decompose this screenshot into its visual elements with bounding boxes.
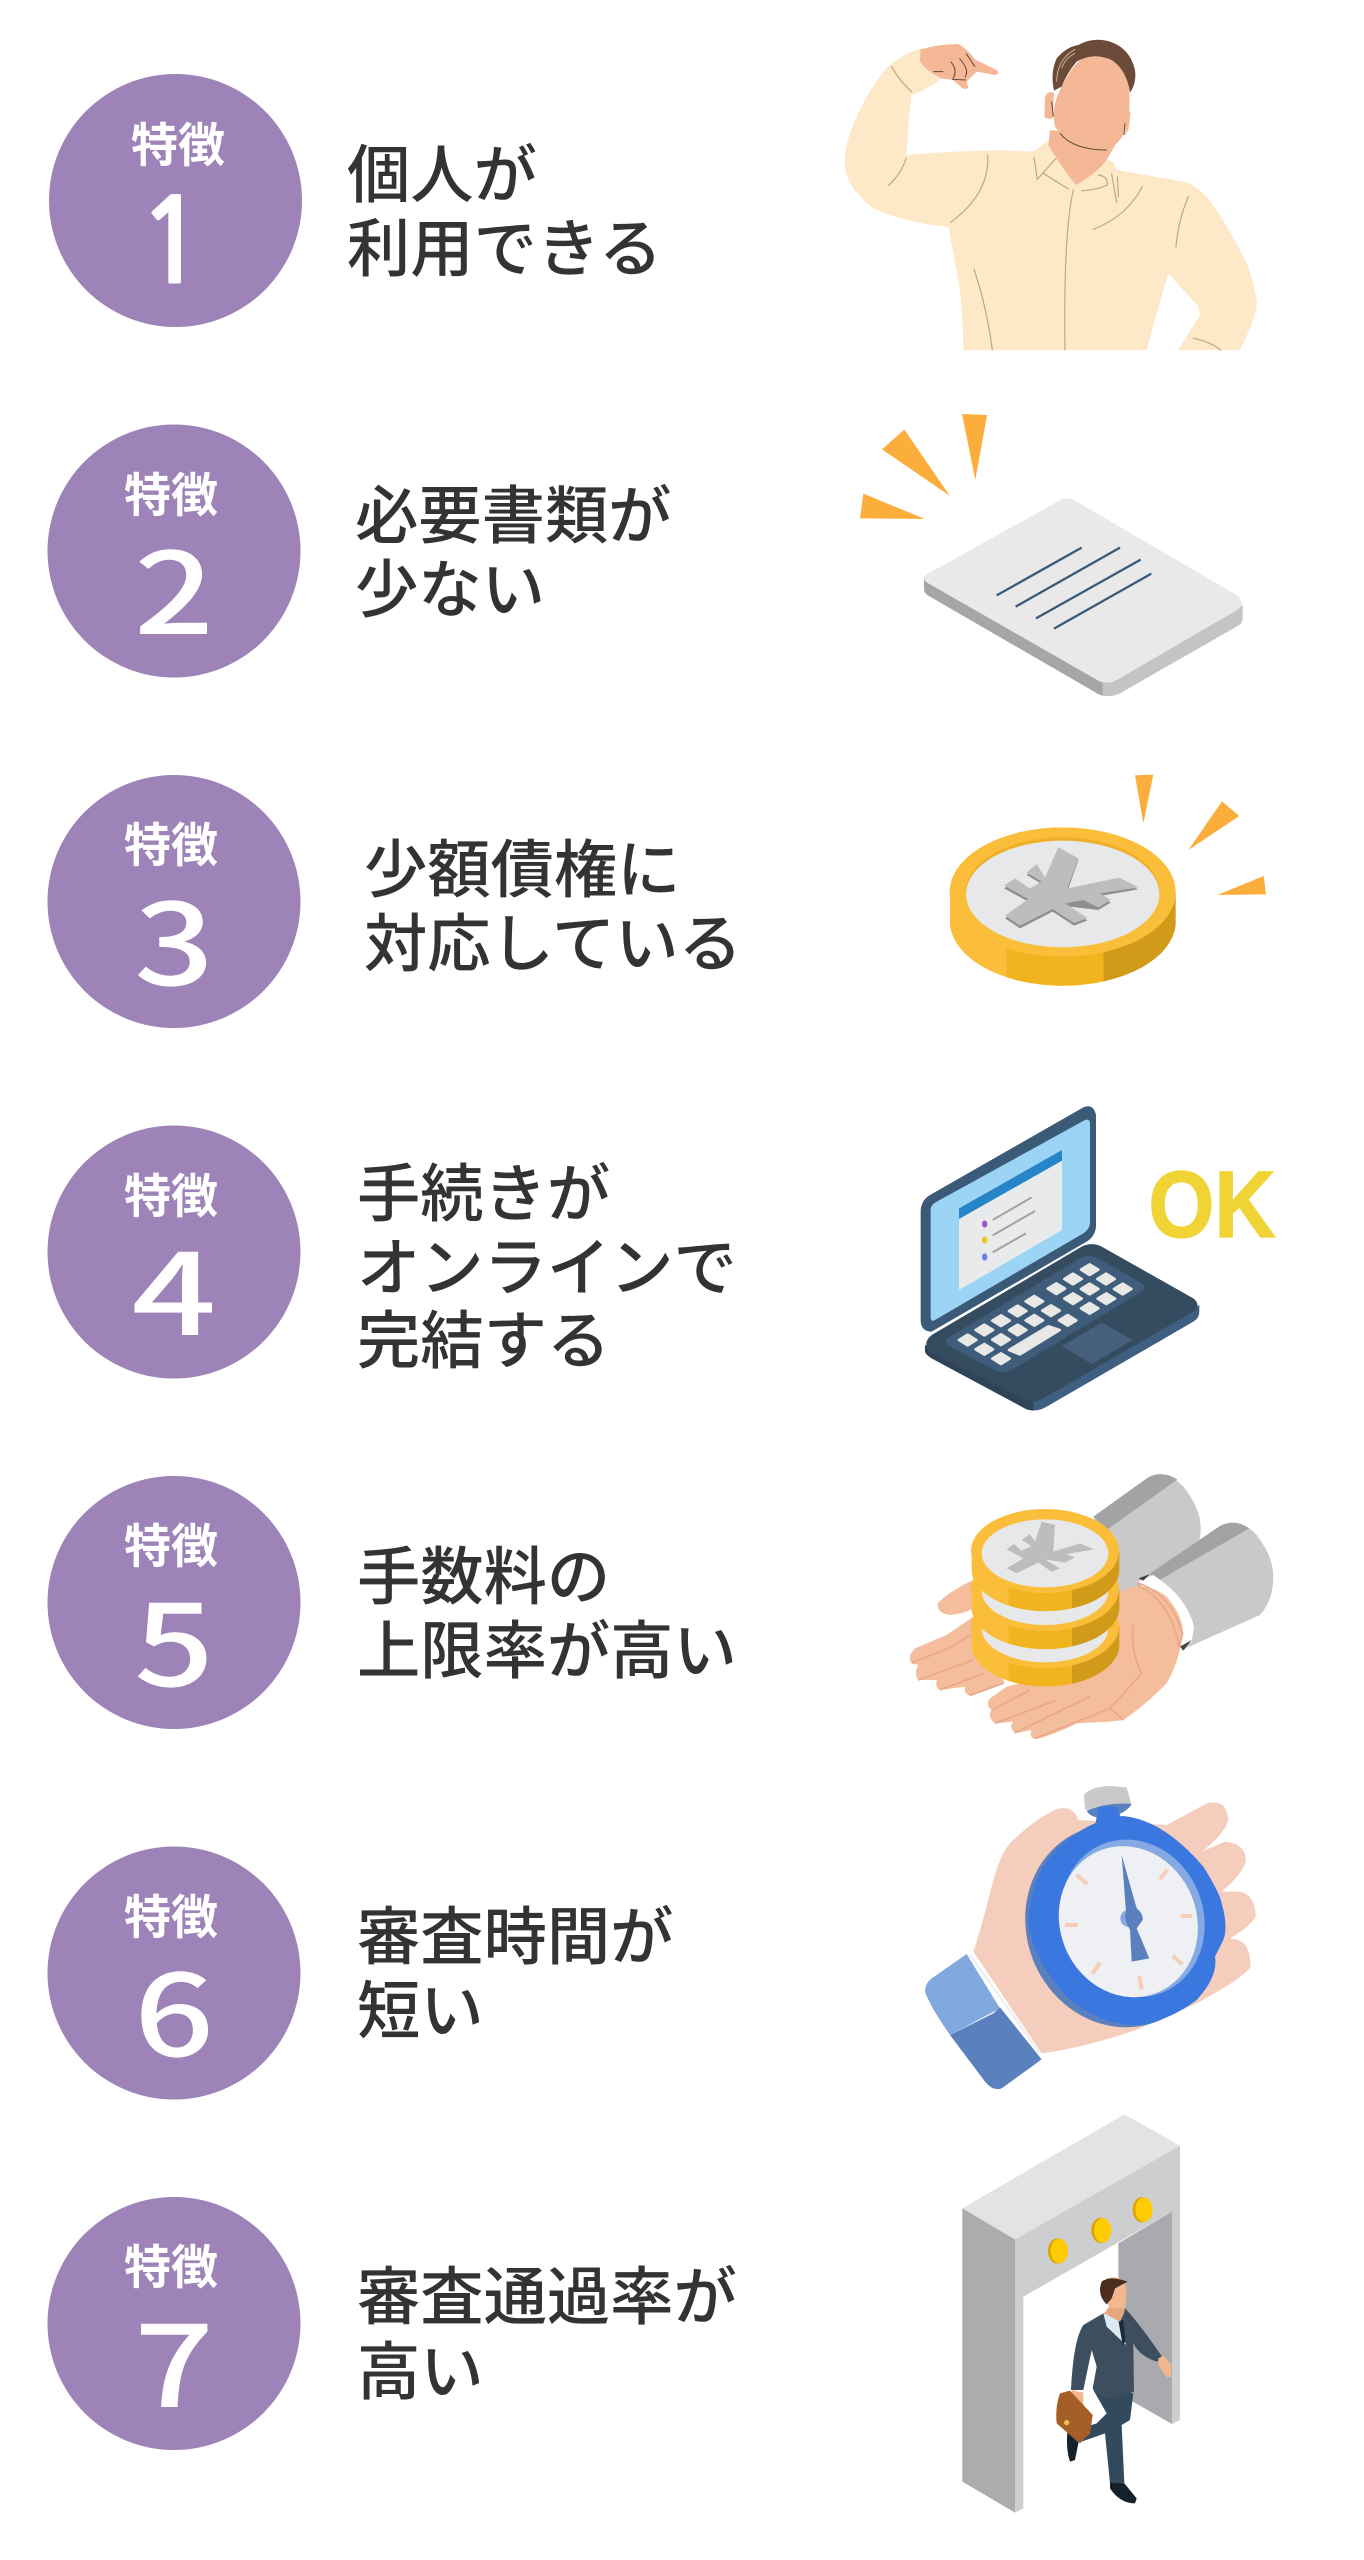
badge 3: 3 [134, 854, 214, 1018]
label 6: 審査時間が [357, 1903, 673, 1973]
cuff [925, 1954, 1042, 2089]
badge 7: 7 [134, 2276, 214, 2440]
badge 5 [48, 1476, 300, 1729]
feature 2 [48, 414, 1243, 696]
laptop base [925, 1244, 1199, 1411]
badge 4: 特徴 [124, 1170, 218, 1223]
badge 2: 2 [134, 503, 214, 667]
paper [924, 498, 1243, 696]
badge 5: 特徴 [124, 1520, 218, 1573]
illustration: yen coin with sparks [950, 775, 1266, 986]
label 6: 短い [357, 1977, 484, 2047]
badge 7 [48, 2197, 300, 2450]
label 2: 少ない [355, 556, 545, 626]
label 7: 高い [357, 2338, 484, 2408]
feature 6 [48, 1786, 1256, 2100]
badge 1 [49, 74, 302, 327]
feature 4 [48, 1106, 1276, 1411]
illustration: hand holding stopwatch [925, 1786, 1256, 2089]
feature 5 [48, 1474, 1273, 1739]
label 7: 審査通過率が [357, 2263, 737, 2333]
sparks [860, 414, 987, 519]
badge 6 [48, 1846, 300, 2100]
illustration: laptop with OK [921, 1106, 1276, 1411]
palms [910, 1581, 1183, 1739]
laptop screen [921, 1106, 1096, 1332]
label 3: 対応している [364, 910, 742, 980]
sleeves [1093, 1474, 1273, 1651]
badge 3: 特徴 [124, 819, 218, 872]
businessman [1056, 2277, 1172, 2503]
illustration: businessman walking through a gate [962, 2114, 1180, 2513]
badge 1: 1 [136, 184, 208, 301]
feature 1 [49, 40, 1257, 350]
illustration: hands holding coin stack [910, 1474, 1273, 1739]
badge 4: 4 [132, 1204, 216, 1368]
label 4: 手続きが [357, 1160, 610, 1230]
illustration: document with sparks [860, 414, 1243, 696]
coin [950, 827, 1176, 986]
badge 3 [48, 775, 300, 1028]
feature 7 [48, 2114, 1180, 2513]
badge 5: 5 [134, 1555, 214, 1719]
illustration: man pointing at himself [845, 40, 1257, 350]
label 5: 手数料の [357, 1543, 610, 1613]
gate [962, 2114, 1180, 2513]
badge 2 [48, 424, 300, 678]
badge 6: 6 [134, 1925, 214, 2089]
label 4: オンラインで [357, 1234, 737, 1304]
keys [959, 1264, 1131, 1364]
badge 2: 特徴 [124, 469, 218, 522]
label 1: 個人が [347, 141, 537, 211]
badge 4 [48, 1126, 300, 1378]
label 3: 少額債権に [364, 836, 680, 906]
badge 6: 特徴 [124, 1891, 218, 1944]
label 4: 完結する [357, 1307, 610, 1377]
hand [973, 1802, 1256, 2053]
stopwatch [995, 1786, 1244, 2056]
label 5: 上限率が高い [357, 1617, 737, 1687]
label 2: 必要書類が [355, 482, 671, 552]
coin stack [971, 1509, 1119, 1687]
sparks [1135, 775, 1266, 895]
badge 1: 特徴 [131, 119, 225, 172]
badge 7: 特徴 [124, 2241, 218, 2294]
label 1: 利用できる [347, 215, 662, 285]
feature 3 [48, 775, 1266, 1028]
OK text: OK [1148, 1152, 1276, 1257]
